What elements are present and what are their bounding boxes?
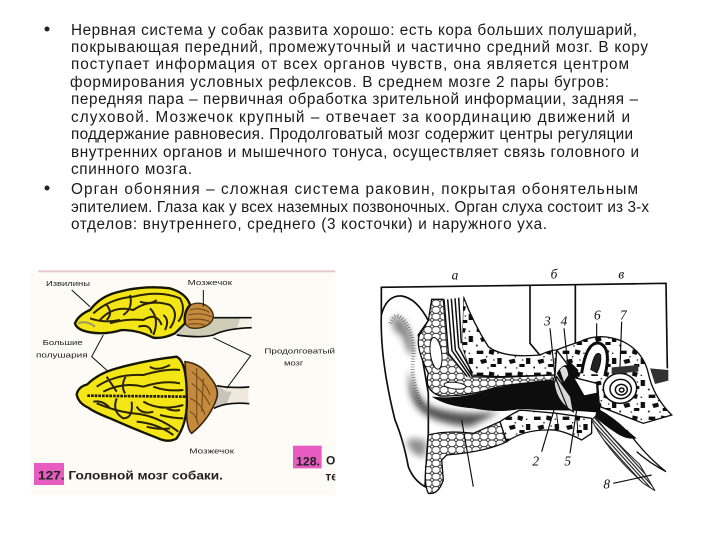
ear labels: 4 xyxy=(561,314,568,329)
text block: nervous system: поступает информация от всех органов чувств, она является центром xyxy=(71,56,629,73)
tube hatching 8 xyxy=(592,417,655,491)
brain labels: Мозжечок xyxy=(189,446,235,455)
inner dark tube xyxy=(595,408,637,439)
text block: nervous system: спинного мозга. xyxy=(71,161,192,178)
upper cartilage xyxy=(418,299,555,396)
text block: nervous system: покрывающая передний, промежуточный и частично средний мозг. В кору xyxy=(71,39,648,56)
eardrum and ossicles xyxy=(554,377,573,412)
leader lines xyxy=(462,322,652,487)
brainstem top xyxy=(213,387,248,409)
leader lines xyxy=(72,290,251,388)
bullet: nervous system xyxy=(44,26,50,32)
brain labels: мозг xyxy=(284,359,304,368)
figure 128 caption: те xyxy=(325,469,338,483)
text block: sense organs: Орган обоняния – сложная система раковин, покрытая обонятельным xyxy=(71,181,638,198)
upper bone xyxy=(462,297,557,377)
text block: nervous system: Нервная система у собак развита хорошо: есть кора больших полушарий, xyxy=(71,22,637,39)
auditory nerve xyxy=(612,365,638,374)
ear labels: 8 xyxy=(603,477,610,492)
brain labels: Мозжечок xyxy=(188,278,233,287)
outer ear xyxy=(381,296,428,487)
ear shading xyxy=(391,316,500,457)
text block: nervous system: формирования условных рефлексов. В среднем мозге 2 пары бугров: xyxy=(70,74,609,91)
brain labels: Продолговатый xyxy=(264,346,335,355)
brain side view xyxy=(75,287,252,338)
figure 127 caption: 127. Головной мозг собаки. xyxy=(38,469,223,483)
inner ear bone xyxy=(557,337,672,423)
ear labels: в xyxy=(618,266,624,281)
lower cartilage xyxy=(425,422,507,493)
text block: nervous system: внутренних органов и мышечного тонуса, осуществляет связь головного и xyxy=(71,144,639,161)
text block: nervous system: поддержание равновесия. Продолговатый мозг содержит центры регуляции xyxy=(71,126,633,143)
figure 128 caption xyxy=(296,453,338,483)
figure 128 caption: О xyxy=(326,453,335,467)
text block: sense organs: отделов: внутреннего, среднего (3 косточки) и наружного уха. xyxy=(71,216,547,233)
lower bone xyxy=(500,410,592,442)
middle ear dark xyxy=(564,360,600,412)
brainstem side xyxy=(177,318,252,336)
brain top view xyxy=(77,357,249,441)
bullet list text xyxy=(44,22,649,233)
text block: nervous system xyxy=(70,22,648,178)
cochlea xyxy=(603,373,637,403)
brain labels: Извилины xyxy=(46,279,90,288)
text block: sense organs: эпителием. Глаза как у всех наземных позвоночных. Орган слуха состоит из 3-х xyxy=(71,199,649,216)
panel: ear diagram xyxy=(381,266,672,493)
semicircular canals xyxy=(582,343,607,375)
bullet: sense organs xyxy=(44,186,50,190)
hemispheres top xyxy=(77,357,187,441)
text block: nervous system: слуховой. Мозжечок крупный – отвечает за координацию движений и xyxy=(71,109,630,126)
hemisphere side xyxy=(75,287,190,338)
brain labels xyxy=(36,278,335,455)
ear labels: б xyxy=(551,266,559,281)
brackets a b v xyxy=(381,283,667,375)
cerebellum side xyxy=(184,303,213,328)
figure 127 badge xyxy=(34,463,64,485)
right crop mask xyxy=(335,265,352,502)
panel background xyxy=(31,271,335,495)
ear labels: 6 xyxy=(594,307,601,322)
ear labels: а xyxy=(452,267,459,282)
ear labels xyxy=(452,266,628,492)
ear labels: 3 xyxy=(543,314,551,329)
panel: dog brain figure xyxy=(31,265,352,502)
ear labels: 7 xyxy=(620,307,628,322)
brain labels: полушария xyxy=(36,351,88,360)
cerebellum top xyxy=(185,362,217,433)
figure 128 badge xyxy=(293,446,322,468)
figure 128 caption: 128. xyxy=(296,455,320,469)
text block: sense organs xyxy=(71,181,649,233)
ear labels: 5 xyxy=(564,454,571,469)
brain labels: Большие xyxy=(43,338,83,347)
ear canal black xyxy=(432,381,601,413)
text block: nervous system: передняя пара – первичная обработка зрительной информации, задняя – xyxy=(71,91,638,108)
muscle hatching xyxy=(443,297,472,377)
ear labels: 2 xyxy=(532,454,539,469)
